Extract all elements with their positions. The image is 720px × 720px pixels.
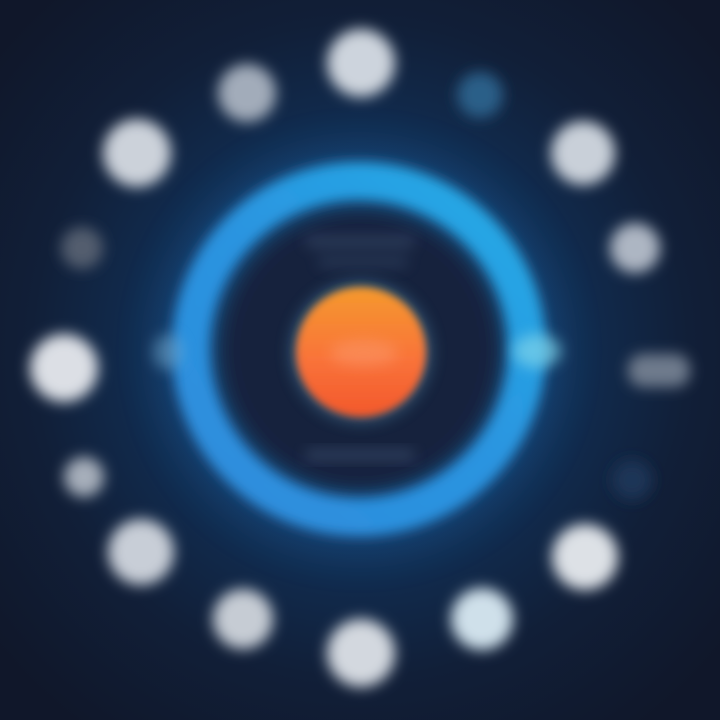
center orange glow [289,280,433,424]
node bottom left outer [108,519,174,585]
node top right blue [457,72,503,118]
inner dark disc [209,200,509,500]
node lower left [64,457,104,497]
node bottom left inner [213,589,273,649]
node top [327,29,395,97]
center orange sphere [296,287,426,417]
node mid-upper left dim [61,227,103,269]
node left [30,334,98,402]
node lower right dim [612,460,652,500]
node bottom right outer [552,524,618,590]
node top left [218,64,276,122]
node bottom [327,619,395,687]
main blue ring [191,181,527,517]
inner label top [305,236,415,267]
ring highlight right [513,334,561,368]
ring glow [181,172,537,528]
node bottom right inner [451,588,513,650]
node upper left [103,119,171,187]
node right pill [628,354,690,387]
node mid-upper right [610,223,660,273]
inner label bottom [305,449,415,461]
ring node left [153,334,183,370]
center highlight [330,340,398,366]
node upper right [551,121,615,185]
